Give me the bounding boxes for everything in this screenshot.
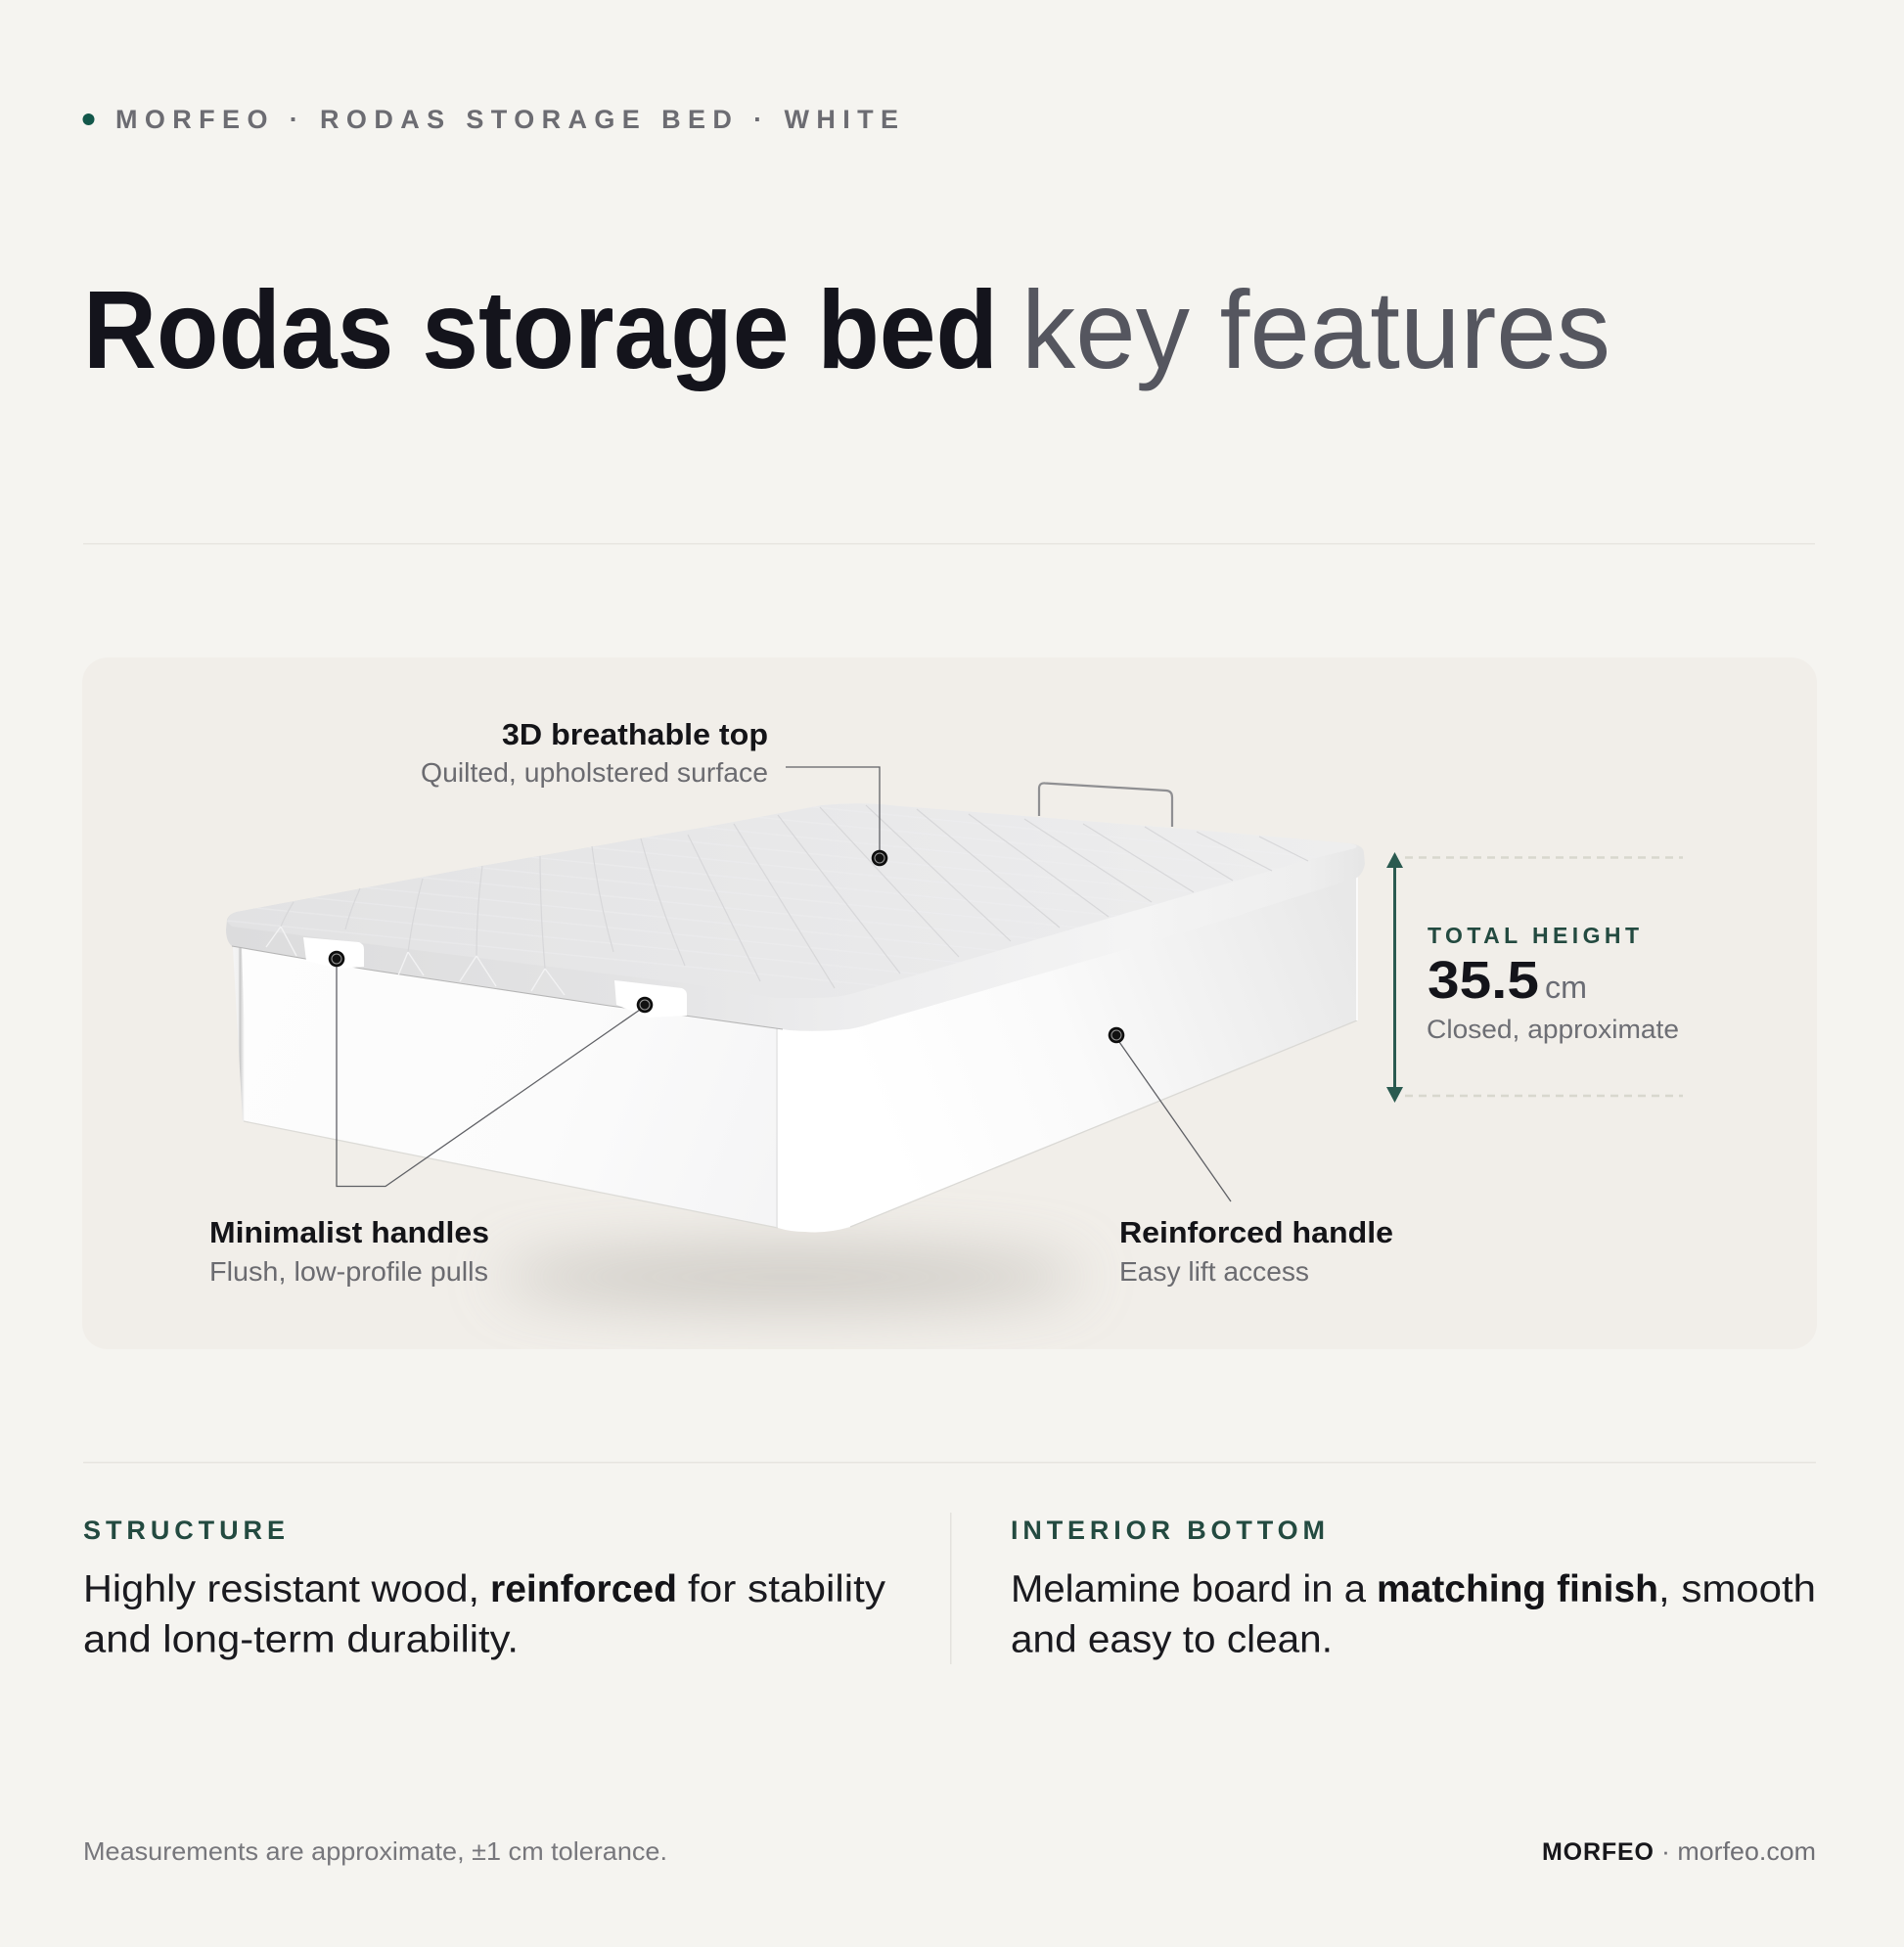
panel: structure: Highly resistant wood, [83, 1568, 479, 1610]
panel: structure: reinforced [490, 1568, 677, 1610]
callout: 3D breathable top [421, 717, 887, 866]
floor shadow [497, 1247, 1084, 1306]
handle: left [303, 937, 364, 969]
panel: interior bottom: INTERIOR BOTTOM [1011, 1516, 1325, 1545]
panel: product diagram [211, 723, 1683, 1349]
callout: total height measurement [1427, 923, 1679, 1044]
icon: bed illustration [226, 748, 1365, 1232]
panel: interior bottom [1011, 1516, 1816, 1661]
callout: total height measurement: Closed, approximate [1427, 1015, 1679, 1044]
callout: 3D breathable top: Quilted, upholstered surface [421, 757, 768, 788]
callout: minimalist handles: Minimalist handles [209, 1215, 489, 1249]
callout: total height measurement: TOTAL HEIGHT [1428, 923, 1639, 948]
footer note: Measurements are approximate, ±1 cm tolerance. [83, 1836, 667, 1866]
arrow: total height [1386, 852, 1683, 1103]
callout: reinforced handle [1109, 1027, 1393, 1287]
eyebrow: MORFEO · RODAS STORAGE BED · WHITE [115, 105, 898, 134]
panel: interior bottom: Melamine board in a [1011, 1568, 1366, 1610]
panel: interior bottom: and easy to clean. [1011, 1618, 1333, 1661]
title: Rodas storage bed [83, 268, 998, 391]
title [83, 268, 1610, 391]
callout: minimalist handles [209, 951, 653, 1287]
callout: reinforced handle: Reinforced handle [1119, 1215, 1393, 1249]
panel: interior bottom: , smooth [1658, 1568, 1816, 1610]
handle: centre [614, 980, 687, 1018]
footer brand: MORFEO [1542, 1838, 1654, 1866]
title: key features [1021, 268, 1610, 391]
callout: 3D breathable top: 3D breathable top [502, 717, 768, 751]
footer brand: · morfeo.com [1661, 1836, 1816, 1866]
callout: reinforced handle: Easy lift access [1119, 1256, 1309, 1287]
panel: interior bottom: matching finish [1377, 1568, 1658, 1610]
footer brand [1542, 1836, 1816, 1866]
panel: structure: for stability [688, 1568, 886, 1610]
panel: structure: STRUCTURE [83, 1516, 285, 1545]
panel: structure [83, 1516, 886, 1661]
callout: total height measurement: cm [1545, 970, 1587, 1005]
callout: minimalist handles: Flush, low-profile pulls [209, 1256, 488, 1287]
callout: total height measurement: 35.5 [1428, 951, 1539, 1010]
panel: structure: and long-term durability. [83, 1618, 519, 1661]
